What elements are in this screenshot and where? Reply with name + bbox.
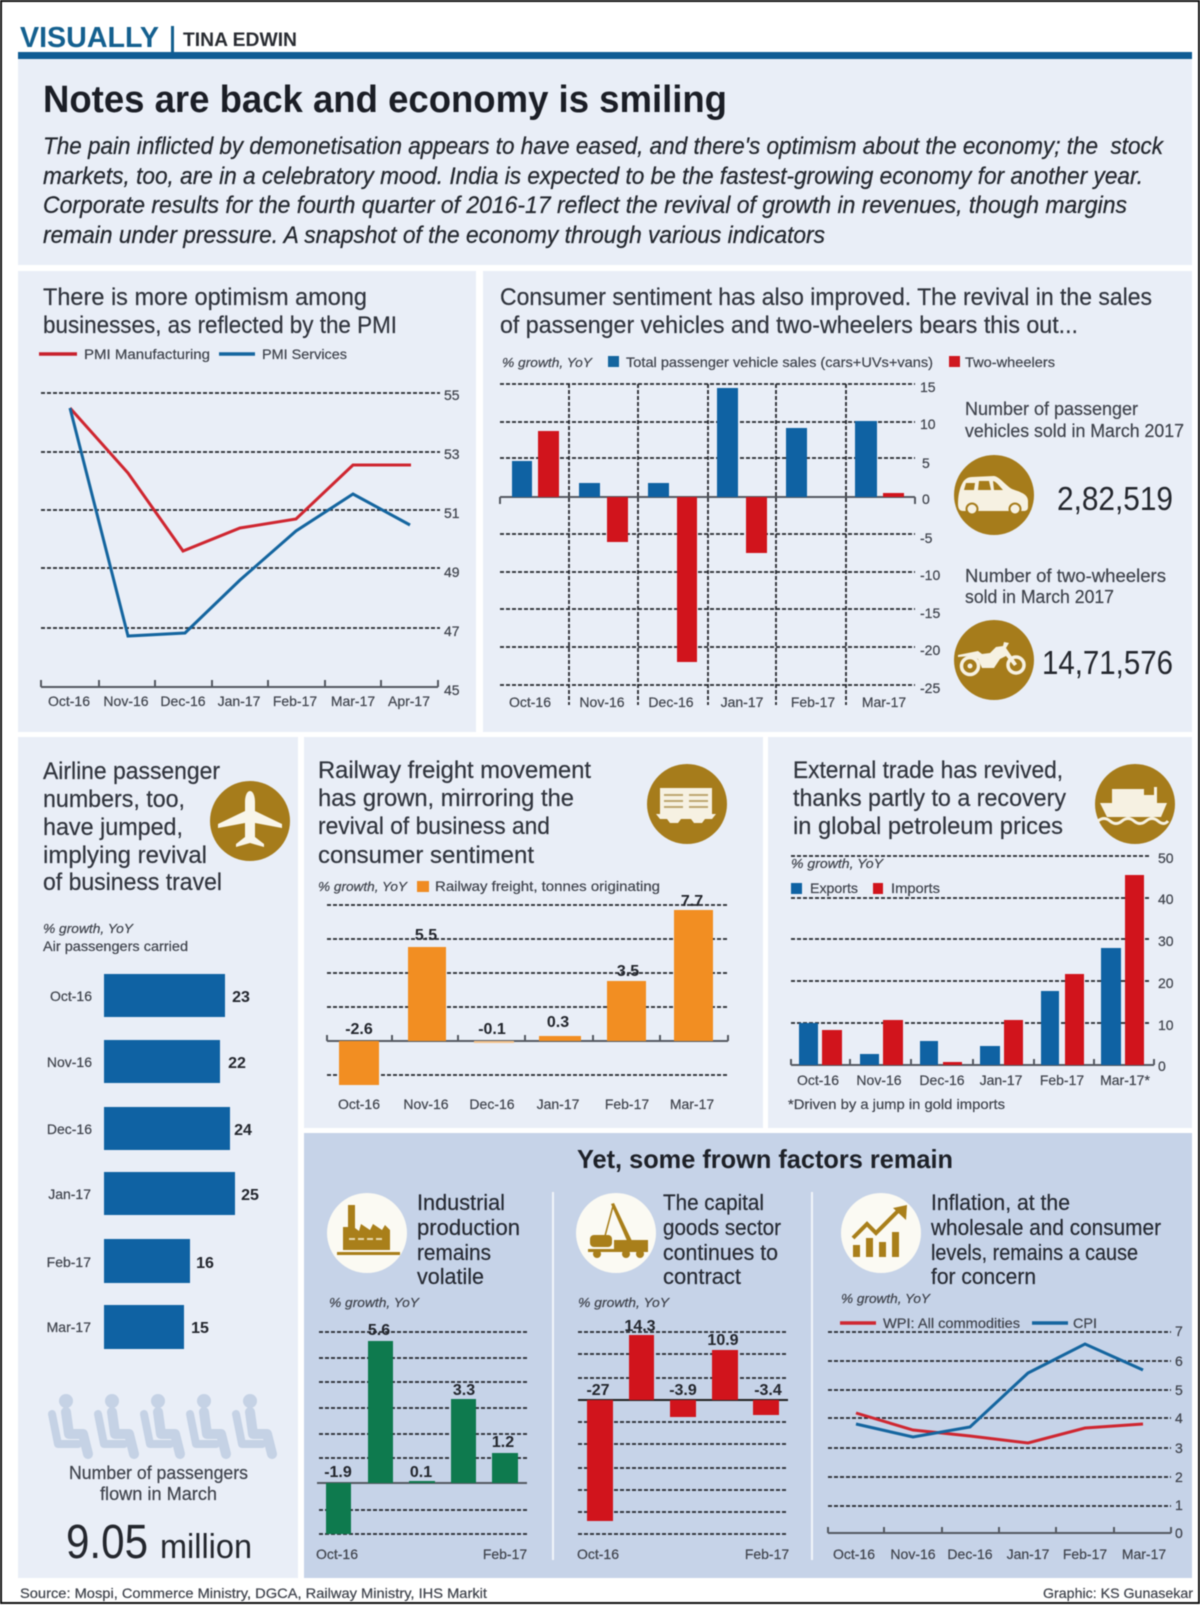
bar chart: industrial production: 1.2 (492, 1434, 514, 1451)
masthead: VISUALLY (20, 22, 159, 54)
bar chart: vehicle sales: -15 (920, 605, 940, 621)
line chart: inflation: 2 (1175, 1469, 1183, 1485)
line chart: inflation: 6 (1175, 1353, 1183, 1369)
legend: inflation: WPI: All commodities (883, 1315, 1020, 1331)
heading: trade (793, 757, 1066, 840)
icon: airplane (210, 781, 290, 861)
bar chart: air passengers: Dec-16 (47, 1121, 92, 1137)
heading: inflation: for concern (931, 1264, 1036, 1289)
bar chart: railway freight: Feb-17 (605, 1096, 649, 1112)
line chart: PMI: 51 (444, 505, 460, 521)
legend: inflation (840, 1315, 1097, 1331)
stat: passengers flown: million (160, 1528, 252, 1566)
line chart: inflation: Oct-16 (833, 1546, 875, 1562)
bar chart: vehicle sales: -25 (920, 680, 940, 696)
line chart: inflation: Feb-17 (1063, 1546, 1107, 1562)
bar chart: capital goods: 14.3 (624, 1318, 656, 1335)
bar chart: vehicle sales: Dec-16 (648, 694, 694, 710)
heading: inflation (930, 1190, 1161, 1289)
bar chart: trade: 0 (1158, 1058, 1166, 1074)
heading: railway (318, 757, 591, 869)
bar chart: railway freight: Jan-17 (537, 1096, 580, 1112)
icon: cargo ship (1095, 764, 1175, 844)
bar chart: capital goods: -3.9 (669, 1382, 697, 1399)
legend: trade: Exports (810, 880, 858, 896)
caption: air passengers (43, 921, 188, 954)
bar chart: trade: 10 (1158, 1017, 1174, 1033)
bar chart: industrial production: Oct-16 (316, 1546, 358, 1562)
icon: motorbike (954, 620, 1034, 700)
bar chart: capital goods: 10.9 (707, 1332, 739, 1349)
line chart: PMI: Mar-17 (331, 693, 375, 709)
heading: airline: numbers, too, (43, 786, 185, 813)
bar chart: trade: Oct-16 (797, 1072, 839, 1088)
bar chart: vehicle sales: 0 (922, 491, 930, 507)
bar chart: trade: Dec-16 (919, 1072, 965, 1088)
bar chart: air passengers: Mar-17 (47, 1319, 91, 1335)
icon: crane truck (576, 1193, 656, 1273)
bar chart: railway freight: Nov-16 (403, 1096, 449, 1112)
masthead (18, 22, 1192, 59)
source line: Source: Mospi, Commerce Ministry, DGCA, Railway Ministry, IHS Markit (20, 1585, 487, 1601)
sub-panel: capital goods: % growth, YoY (578, 1295, 670, 1310)
stat: two-wheelers: sold in March 2017 (965, 587, 1114, 607)
heading: capital goods: continues to (663, 1240, 778, 1265)
heading: capital goods (663, 1190, 781, 1289)
line chart: inflation: Mar-17 (1122, 1546, 1166, 1562)
bar chart: capital goods: Feb-17 (745, 1546, 789, 1562)
bar chart: trade: Nov-16 (856, 1072, 902, 1088)
bar chart: railway freight: -0.1 (478, 1021, 506, 1038)
legend: inflation: CPI (1073, 1315, 1097, 1331)
bar chart: railway freight: Mar-17 (670, 1096, 714, 1112)
stat: passenger vehicles (954, 399, 1184, 535)
heading: PMI: businesses, as reflected by the PMI (43, 312, 397, 339)
bar chart: industrial production: -1.9 (324, 1464, 352, 1481)
line chart: inflation: 7 (1175, 1323, 1183, 1339)
bar chart: air passengers: Feb-17 (47, 1254, 91, 1270)
heading: capital goods: contract (663, 1264, 741, 1289)
bar chart: vehicle sales: Oct-16 (509, 694, 551, 710)
heading: airline: implying revival (43, 842, 207, 869)
line chart: inflation: 5 (1175, 1382, 1183, 1398)
bar chart: air passengers: 16 (196, 1255, 214, 1272)
bar chart: air passengers: 25 (241, 1187, 259, 1204)
bar chart: vehicle sales: Feb-17 (791, 694, 835, 710)
bar chart: air passengers: 24 (234, 1122, 252, 1139)
line chart: PMI: Feb-17 (273, 693, 317, 709)
sub-panel: inflation: % growth, YoY (841, 1291, 931, 1306)
heading: inflation: wholesale and consumer (930, 1215, 1161, 1240)
line chart: inflation (828, 1323, 1183, 1562)
bar chart: industrial production: 5.6 (368, 1322, 390, 1339)
stat: passenger vehicles: vehicles sold in March 2017 (965, 421, 1184, 441)
bar chart: trade (791, 850, 1174, 1088)
heading: capital goods: goods sector (663, 1215, 781, 1240)
bar chart: capital goods: Oct-16 (577, 1546, 619, 1562)
bar chart: air passengers: Jan-17 (48, 1186, 91, 1202)
icon: passenger seats (52, 1394, 272, 1454)
icon: rising chart (841, 1193, 921, 1273)
heading: airline: of business travel (43, 869, 222, 896)
heading: trade: thanks partly to a recovery (793, 785, 1066, 812)
line chart: inflation: Nov-16 (890, 1546, 936, 1562)
sub-panel: inflation (828, 1190, 1183, 1562)
bar chart: vehicle sales: -5 (920, 530, 933, 546)
bar chart: railway freight: 0.3 (547, 1014, 569, 1031)
heading: consumer sentiment: Consumer sentiment has also improved. The revival in the sales (500, 284, 1152, 311)
icon: factory (327, 1193, 407, 1273)
sub-panel: capital goods (576, 1190, 789, 1562)
panel: external trade (768, 737, 1192, 1128)
panel: airline passengers (18, 737, 298, 1578)
bar chart: trade: 40 (1158, 891, 1174, 907)
line chart: PMI: 45 (444, 682, 460, 698)
bar chart: trade: Mar-17* (1100, 1072, 1150, 1088)
heading: airline (43, 758, 222, 896)
stat: two-wheelers (954, 566, 1173, 700)
heading: airline: Airline passenger (43, 758, 220, 785)
stat: passengers flown: Number of passengers (69, 1463, 248, 1483)
sub-panel: industrial production (316, 1190, 527, 1562)
bar chart: capital goods: -27 (586, 1382, 610, 1399)
intro text (43, 133, 1165, 249)
bar chart: air passengers: 22 (228, 1055, 246, 1072)
legend: vehicle sales (502, 354, 1055, 370)
bar chart: railway freight: Dec-16 (469, 1096, 515, 1112)
line chart: inflation: Dec-16 (947, 1546, 993, 1562)
bar chart: trade: 50 (1158, 850, 1174, 866)
legend: vehicle sales: Total passenger vehicle sales (cars+UVs+vans) (626, 354, 933, 370)
sub-panel: industrial production: % growth, YoY (329, 1295, 420, 1310)
bar chart: trade: 20 (1158, 975, 1174, 991)
legend: vehicle sales: % growth, YoY (502, 355, 593, 370)
icon: freight wagon (647, 764, 727, 844)
bar chart: railway freight: 7.7 (681, 893, 703, 910)
panel: railway freight (304, 737, 763, 1128)
line chart: PMI: 55 (444, 387, 460, 403)
stat: passenger vehicles: 2,82,519 (1057, 480, 1173, 517)
bar chart: air passengers: 15 (191, 1320, 209, 1337)
heading: railway: Railway freight movement (318, 757, 591, 784)
heading: PMI (43, 284, 397, 339)
legend: railway (318, 878, 660, 894)
bar chart: railway freight: 5.5 (415, 927, 437, 944)
bar chart: vehicle sales: Nov-16 (579, 694, 625, 710)
line chart: inflation: 3 (1175, 1440, 1183, 1456)
heading: railway: has grown, mirroring the (318, 785, 574, 812)
heading: trade: External trade has revived, (793, 757, 1063, 784)
stat: passengers flown (66, 1463, 252, 1569)
bar chart: air passengers: Nov-16 (47, 1054, 92, 1070)
bar chart: industrial production (316, 1322, 527, 1562)
panel: frown factors (304, 1133, 1192, 1578)
line chart: PMI: Nov-16 (103, 693, 149, 709)
bar chart: vehicle sales: Mar-17 (862, 694, 906, 710)
heading: railway: consumer sentiment (318, 842, 534, 869)
bar chart: vehicle sales: 10 (920, 416, 936, 432)
legend: trade: % growth, YoY (791, 856, 884, 871)
bar chart: trade: Feb-17 (1040, 1072, 1084, 1088)
heading: PMI: There is more optimism among (43, 284, 367, 311)
legend: railway: % growth, YoY (318, 879, 408, 894)
bar chart: trade: Jan-17 (980, 1072, 1023, 1088)
line chart: PMI: Jan-17 (218, 693, 261, 709)
line chart: PMI: Apr-17 (388, 693, 430, 709)
panel: consumer sentiment (483, 271, 1192, 732)
heading: airline: have jumped, (43, 814, 183, 841)
heading: railway: revival of business and (318, 813, 550, 840)
line chart: PMI (41, 387, 460, 709)
bar chart: railway freight: -2.6 (345, 1021, 373, 1038)
heading: industrial production: production (417, 1215, 520, 1240)
line chart: PMI: Oct-16 (48, 693, 90, 709)
heading: industrial production (417, 1190, 520, 1289)
stat: passengers flown: 9.05 (66, 1516, 148, 1569)
legend: PMI: PMI Manufacturing (84, 346, 210, 362)
footnote: trade: *Driven by a jump in gold imports (788, 1096, 1005, 1112)
bar chart: air passengers: Oct-16 (50, 988, 92, 1004)
heading: industrial production: Industrial (417, 1190, 505, 1215)
legend: trade: Imports (891, 880, 940, 896)
heading: capital goods: The capital (663, 1190, 764, 1215)
heading: consumer sentiment: of passenger vehicles and two-wheelers bears this out... (500, 312, 1078, 339)
bar chart: air passengers: 23 (232, 989, 250, 1006)
bar chart: capital goods: -3.4 (754, 1382, 782, 1399)
bar chart: air passengers (47, 974, 259, 1349)
masthead: TINA EDWIN (183, 30, 297, 51)
bar chart: industrial production: 3.3 (453, 1382, 475, 1399)
heading: trade: in global petroleum prices (793, 813, 1063, 840)
line chart: inflation: 0 (1175, 1525, 1183, 1541)
heading: industrial production: volatile (417, 1264, 484, 1289)
legend: PMI (39, 346, 347, 362)
panel: introduction (18, 59, 1192, 265)
bar chart: industrial production: Feb-17 (483, 1546, 527, 1562)
heading: inflation: Inflation, at the (931, 1190, 1070, 1215)
heading: inflation: levels, remains a cause (931, 1240, 1138, 1265)
line chart: inflation: 1 (1175, 1497, 1183, 1513)
title: Notes are back and economy is smiling (43, 79, 727, 121)
line chart: PMI: 53 (444, 446, 460, 462)
bar chart: railway freight (327, 893, 728, 1112)
heading: frown factors: Yet, some frown factors remain (577, 1144, 953, 1174)
bar chart: industrial production: 0.1 (410, 1464, 432, 1481)
graphic credit: Graphic: KS Gunasekar (1043, 1585, 1193, 1601)
line chart: PMI: 49 (444, 564, 460, 580)
heading: consumer sentiment (500, 284, 1152, 339)
caption: air passengers: Air passengers carried (43, 938, 188, 954)
bar chart: vehicle sales: Jan-17 (721, 694, 764, 710)
intro text: Corporate results for the fourth quarter of 2016-17 reflect the revival of growth in revenues, though margins (43, 192, 1127, 219)
icon: car (954, 455, 1034, 535)
line chart: PMI: 47 (444, 623, 460, 639)
bar chart: railway freight: Oct-16 (338, 1096, 380, 1112)
heading: industrial production: remains (417, 1240, 491, 1265)
caption: air passengers: % growth, YoY (43, 921, 134, 936)
stat: two-wheelers: Number of two-wheelers (965, 566, 1166, 586)
legend: trade (791, 856, 940, 896)
legend: PMI: PMI Services (262, 346, 347, 362)
legend: railway: Railway freight, tonnes originating (435, 878, 660, 894)
line chart: inflation: Jan-17 (1007, 1546, 1050, 1562)
panel: PMI (18, 271, 476, 732)
bar chart: vehicle sales: -10 (920, 567, 940, 583)
bar chart: trade: 30 (1158, 933, 1174, 949)
stat: two-wheelers: 14,71,576 (1042, 644, 1173, 681)
line chart: PMI: Dec-16 (160, 693, 206, 709)
bar chart: capital goods (577, 1318, 789, 1562)
legend: vehicle sales: Two-wheelers (965, 354, 1055, 370)
bar chart: vehicle sales: 5 (922, 455, 930, 471)
stat: passengers flown: flown in March (100, 1484, 217, 1504)
bar chart: railway freight: 3.5 (617, 963, 639, 980)
line chart: inflation: 4 (1175, 1410, 1183, 1426)
stat: passenger vehicles: Number of passenger (965, 399, 1138, 419)
bar chart: vehicle sales: 15 (920, 379, 936, 395)
intro text: markets, too, are in a celebratory mood. India is expected to be the fastest-growing economy for another year. (43, 163, 1143, 190)
intro text: remain under pressure. A snapshot of the economy through various indicators (43, 222, 825, 249)
bar chart: vehicle sales: -20 (920, 642, 940, 658)
bar chart: vehicle sales (500, 379, 940, 710)
